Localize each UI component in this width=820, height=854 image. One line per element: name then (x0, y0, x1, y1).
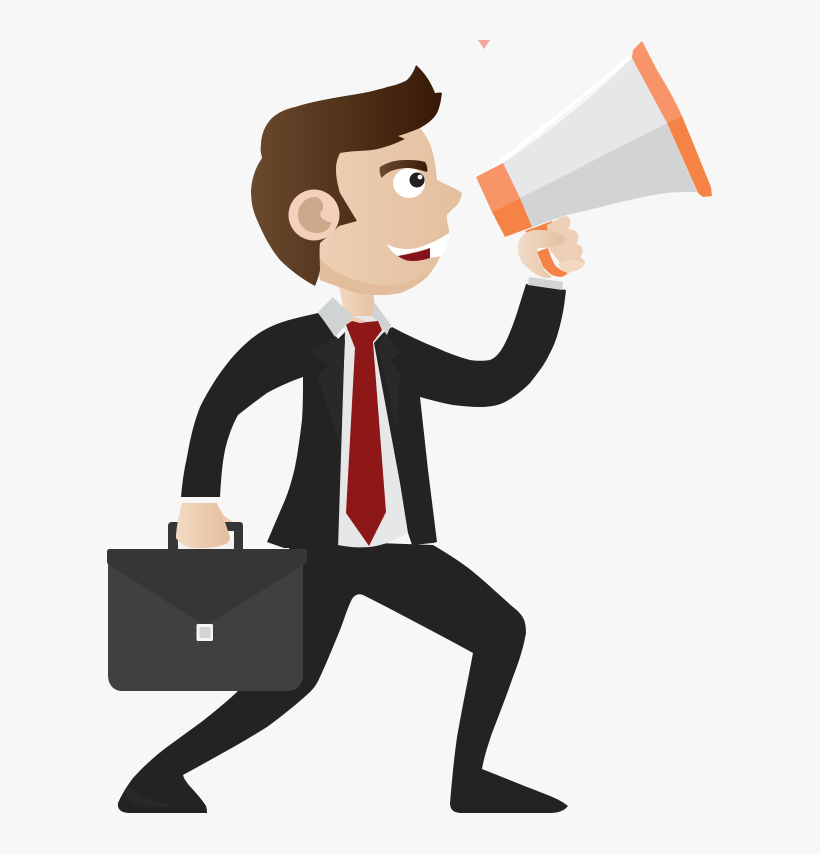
briefcase clasp (196, 624, 213, 641)
icon: stray red fragment (478, 40, 490, 49)
carrying hand (176, 503, 232, 548)
figure: shirt collar (318, 297, 391, 337)
figure: legs and trousers (118, 540, 568, 813)
figure: neck (338, 280, 376, 325)
hair (251, 65, 442, 286)
face (300, 128, 462, 295)
palm and thumb (518, 230, 564, 278)
figure: left lapel (310, 338, 345, 445)
white area behind hand (178, 540, 234, 549)
horn rim lower (667, 116, 712, 197)
figure: right lapel (378, 335, 402, 430)
briefcase (107, 503, 307, 691)
figure: red tie (346, 321, 386, 546)
lower finger (558, 260, 585, 273)
handle top (525, 221, 556, 236)
jaw shadow (320, 257, 440, 295)
handle grip (537, 248, 568, 277)
eye (393, 168, 425, 198)
fingers (547, 216, 585, 273)
back ring upper (476, 163, 520, 212)
mouth (387, 233, 449, 258)
figure: shirt (338, 328, 408, 547)
cone upper (503, 58, 667, 198)
briefcase flap (107, 549, 307, 626)
figure: head (251, 65, 462, 295)
megaphone (476, 41, 712, 290)
briefcase handle (168, 522, 243, 549)
ear (288, 190, 340, 240)
briefcase body (108, 558, 303, 691)
horn rim upper (632, 41, 682, 123)
shirt cuff (528, 277, 563, 290)
cone lower (520, 123, 697, 227)
figure: jacket and arms (181, 284, 566, 548)
highlight (489, 56, 632, 169)
thumb (220, 513, 233, 522)
figure: foot shading (126, 786, 172, 807)
back ring lower (492, 198, 532, 237)
eyebrow (380, 160, 427, 178)
